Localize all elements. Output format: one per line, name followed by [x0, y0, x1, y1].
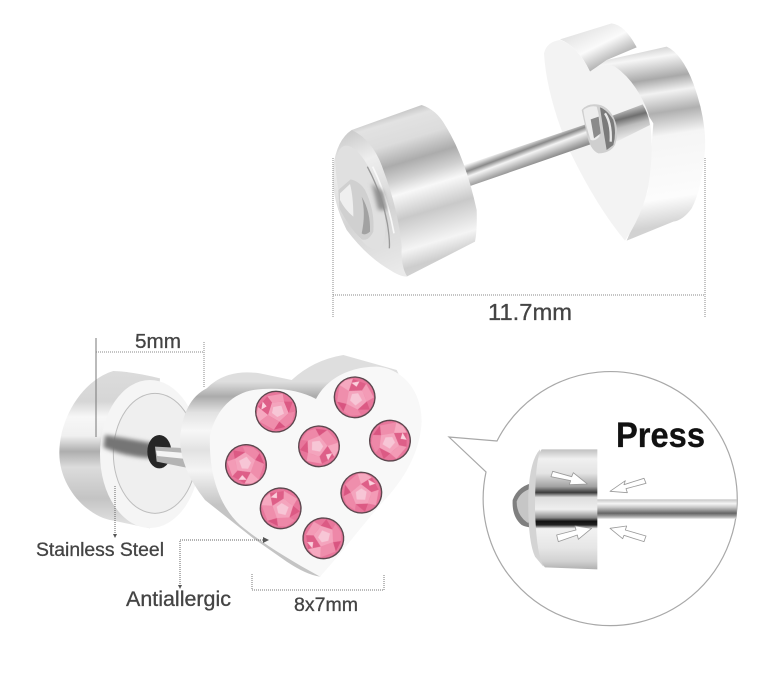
post pin [460, 124, 593, 187]
post pin [155, 447, 190, 468]
front bevel [333, 130, 407, 277]
callout: Stainless Steel [36, 486, 164, 561]
top earring: heart and post [460, 23, 705, 241]
heart face [210, 367, 422, 577]
press detail: earring back [513, 449, 737, 569]
speech bubble [449, 372, 737, 626]
ridge highlight [373, 167, 394, 233]
ridge shadow [372, 183, 387, 210]
inner face [113, 393, 197, 513]
callout: Stainless Steel: Stainless Steel [36, 540, 164, 561]
rear collar [528, 449, 543, 567]
cylinder body [352, 105, 477, 277]
heading: Press: Press [616, 416, 705, 455]
heart back: side wall [560, 23, 705, 241]
callout: Antiallergic: Antiallergic [126, 588, 231, 611]
dimension: 11.7mm: 11.7mm [488, 299, 572, 325]
body [535, 449, 597, 569]
inner plate [326, 140, 396, 255]
dimension: 8x7mm [252, 574, 384, 616]
dimension: 5mm [96, 331, 204, 437]
rhinestones [222, 370, 420, 568]
post hub on heart [610, 104, 650, 142]
dimension: 5mm: 5mm [135, 331, 181, 353]
centre peg [338, 179, 374, 240]
pin highlight [156, 451, 190, 459]
ridge [367, 167, 389, 248]
post washer [582, 104, 617, 153]
callout: Antiallergic [126, 537, 269, 611]
cylinder [59, 371, 160, 528]
post hole [147, 435, 171, 468]
outer face [100, 380, 200, 528]
heart back: flat face [544, 40, 652, 241]
centre peg [513, 483, 535, 527]
post pin [596, 499, 737, 519]
sloped dark band [103, 435, 157, 458]
heart side wall [180, 355, 422, 577]
bottom earring: clutch back [59, 371, 200, 528]
press arrows [551, 471, 646, 542]
top earring: clutch back [326, 105, 477, 277]
dimension: 8x7mm: 8x7mm [294, 594, 358, 616]
bottom earring: heart [180, 355, 422, 577]
